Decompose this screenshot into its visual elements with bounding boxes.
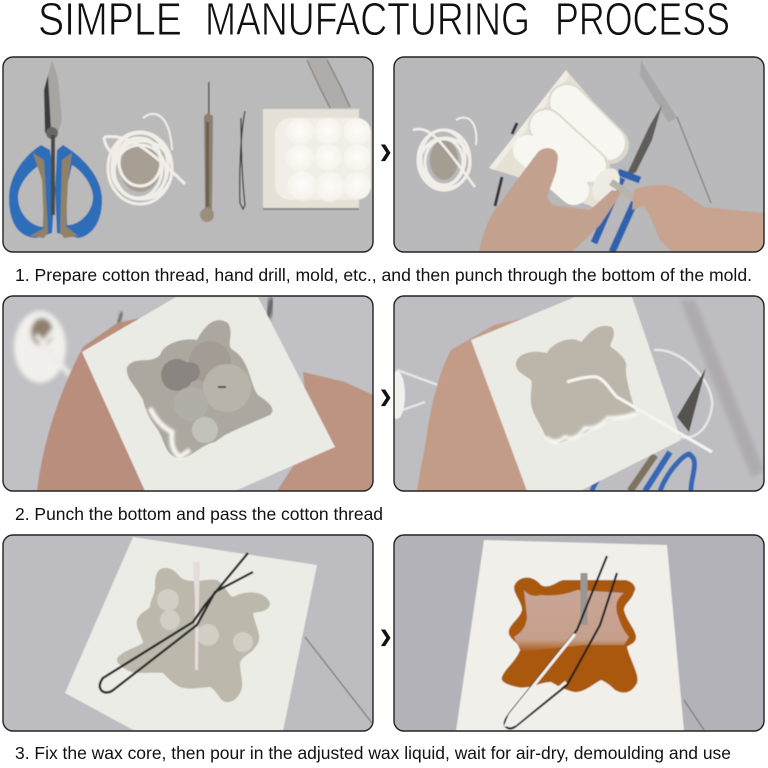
icon: mold cavity — [127, 320, 273, 458]
icon: left hand — [479, 148, 622, 252]
panel border — [3, 296, 373, 491]
icon: white mold — [65, 537, 317, 731]
icon: bobby pin — [100, 553, 253, 692]
icon: amber wax — [502, 577, 638, 693]
panel border — [3, 57, 373, 252]
icon: bobby pin — [495, 123, 517, 206]
arrow: ❯ — [379, 629, 392, 647]
icon: thread loops — [389, 350, 712, 438]
panel border — [3, 535, 373, 731]
icon: white mold — [82, 297, 335, 491]
caption: step 1: 1. Prepare cotton thread, hand drill, mold, etc., and then punch through the bottom of the mold. — [15, 265, 752, 285]
icon: mold cavity — [516, 326, 636, 443]
icon: wick — [580, 573, 588, 625]
panel: tools and materials — [3, 57, 373, 252]
icon: wax residue edge — [546, 413, 636, 442]
icon: scissors — [594, 105, 662, 252]
icon: hand drill — [200, 82, 214, 222]
icon: scissors — [677, 368, 706, 432]
icon: right hand — [277, 372, 373, 491]
icon: scissors — [9, 60, 102, 238]
icon: mold cavity — [117, 568, 270, 702]
icon: wick — [193, 562, 200, 670]
title — [38, 0, 730, 45]
icon: wax translucent upper — [514, 590, 629, 652]
icon: hand — [416, 318, 527, 490]
icon: white mold — [471, 297, 681, 491]
panel: wax poured into mold — [394, 535, 764, 731]
icon: left hand — [36, 318, 145, 490]
arrow: ❯ — [379, 389, 392, 407]
icon: bobby pin — [505, 556, 617, 728]
icon: mold and candle — [489, 70, 625, 210]
icon: bobby pin — [240, 111, 245, 209]
caption: step 3: 3. Fix the wax core, then pour in the adjusted wax liquid, wait for air-dry, demoulding and use — [15, 743, 731, 763]
caption: step 2: 2. Punch the bottom and pass the cotton thread — [15, 504, 383, 524]
icon: drill — [609, 179, 648, 212]
icon: cotton thread coil — [413, 118, 476, 190]
icon: white mold — [456, 540, 684, 731]
icon: cotton thread coil, blurred — [14, 311, 70, 383]
panel border — [394, 535, 764, 731]
panel: punching the mold — [394, 57, 764, 252]
icon: cotton wick — [567, 377, 712, 452]
icon: mold with bubble candle — [263, 109, 371, 210]
panel border — [394, 296, 764, 491]
icon: right hand — [632, 185, 764, 252]
panel: wick fixed with pin — [3, 535, 373, 731]
panel: mold held bottom view — [3, 296, 373, 491]
panel: threading the cotton — [389, 296, 764, 491]
icon: scissors handle — [592, 452, 694, 491]
panel border — [394, 57, 764, 252]
arrow: ❯ — [379, 144, 392, 162]
icon: cotton thread coil — [104, 114, 185, 204]
